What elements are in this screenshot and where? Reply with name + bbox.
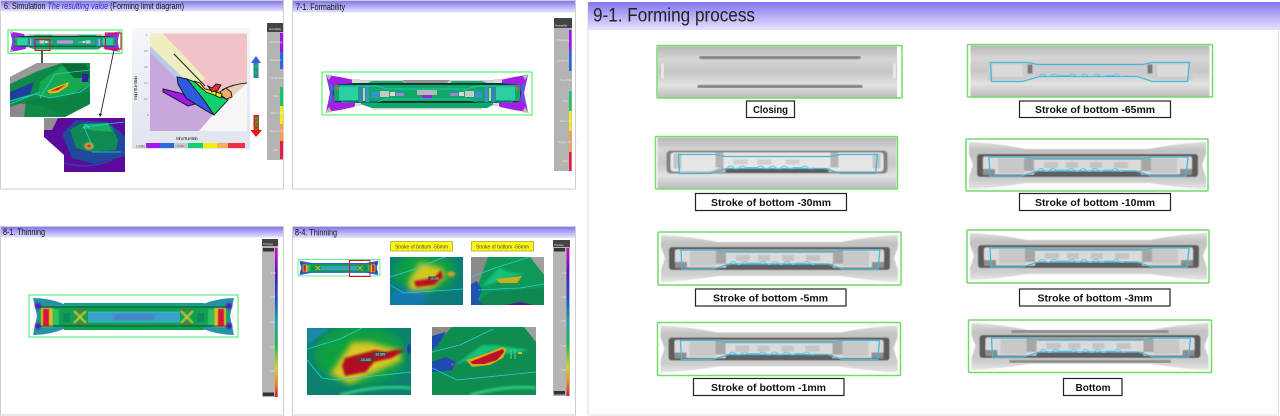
region: wrinkle (150, 52, 213, 131)
label: stroke right: Stroke of bottom -56mm (476, 244, 529, 250)
arrow: wrinkle direction: Wrinkle (254, 61, 260, 78)
color scale: thinning: 0.05 (270, 321, 275, 324)
region: safe lower (199, 83, 247, 131)
color scale: thinning: 0.10 (561, 345, 566, 348)
heading: formability: 7-1. Formability (296, 2, 345, 12)
stage: closing: Closing (753, 104, 788, 116)
legend sidebar: formability: Small Stretch (560, 79, 575, 82)
stage: stroke of bottom -65mm (968, 44, 1212, 118)
chart: forming limit diagram: 0.8 (144, 50, 148, 53)
chart: forming limit diagram: 0 (147, 114, 149, 117)
color scale: thinning: -0.05 (561, 272, 567, 275)
thumbnail: full part with zoom markers (8, 30, 122, 53)
legend (136, 143, 245, 148)
color scale: thinning: 0.00 (270, 296, 275, 299)
stage: stroke of bottom -5mm (658, 232, 901, 306)
color scale: thinning (553, 240, 570, 396)
red marker: center region (35, 40, 50, 50)
legend sidebar: formability: Safe (273, 95, 279, 98)
part: thinning contour (29, 295, 238, 337)
legend sidebar: formability: Excess Thinning (270, 130, 289, 133)
chart: forming limit diagram (132, 28, 250, 149)
color scale: thinning: Thinning (263, 243, 273, 246)
chart: forming limit diagram: 0.6 (144, 66, 148, 69)
region: compress (150, 46, 213, 115)
stage: stroke of bottom -3mm: Stroke of bottom -3mm (1038, 292, 1152, 304)
color scale: thinning: Thinning (554, 244, 564, 247)
legend sidebar: formability: Compress (270, 59, 282, 62)
panel: thinning overview (0, 226, 284, 415)
color scale: thinning: 0.15 (561, 369, 566, 372)
legend sidebar: formability: Formability (269, 28, 282, 31)
detail view: center region (10, 63, 90, 117)
region: thickening (150, 34, 206, 86)
detail: thinning contour large (307, 325, 411, 395)
chart: forming limit diagram: 1 (146, 34, 148, 37)
legend sidebar: formability: Compress (557, 60, 569, 62)
legend sidebar: formability (267, 23, 289, 160)
detail: formability contour small (471, 257, 544, 305)
detail: thinning contour small: -16.283 (430, 276, 439, 280)
part: formability contour (322, 72, 532, 115)
legend sidebar: formability: Thickening (557, 39, 570, 42)
thumbnail: thinning part with marker (298, 260, 380, 276)
region: small stretch (213, 83, 247, 115)
forming limit curve (174, 54, 247, 90)
legend: Limits (136, 144, 145, 148)
detail view: corner region (44, 118, 125, 172)
legend sidebar: formability: Risk of Split (560, 120, 574, 123)
label: stroke left: Stroke of bottom -56mm (395, 244, 448, 250)
heading: thinning detail: 8-4. Thinning (295, 228, 337, 238)
legend sidebar: formability: Formability (555, 24, 568, 28)
axis labels: Minor True Strain (176, 136, 198, 141)
panel: formability (292, 0, 578, 189)
red marker (350, 260, 370, 276)
stage: stroke of bottom -30mm: Stroke of bottom -30mm (711, 197, 831, 209)
red marker: corner region (106, 33, 121, 49)
legend sidebar: formability: Small Stretch (271, 77, 286, 80)
arrow: crack direction: Crack (254, 115, 260, 130)
arrow: corner marker to detail (99, 50, 114, 117)
legend sidebar: formability: Split (273, 149, 278, 152)
stage: stroke of bottom -1mm (658, 322, 900, 396)
panel: forming process (588, 2, 1280, 415)
legend sidebar: formability: Excess Thinning (559, 141, 578, 144)
heading: forming process: 9-1. Forming process (593, 6, 755, 26)
stage: stroke of bottom -1mm: Stroke of bottom -1mm (711, 382, 826, 394)
arrow: center marker to detail (41, 51, 43, 63)
legend sidebar: formability: Thickening (270, 41, 283, 44)
stage: stroke of bottom -5mm: Stroke of bottom -5mm (713, 292, 828, 304)
arrow: crack direction (250, 115, 262, 137)
legend sidebar: formability: Safe (563, 100, 569, 103)
color scale: thinning (262, 239, 278, 397)
panel: simulation forming limit diagram (0, 0, 289, 189)
chart: forming limit diagram: 0.2 (144, 98, 148, 101)
stage: stroke of bottom -65mm: Stroke of bottom -65mm (1035, 104, 1155, 116)
strain points (163, 77, 232, 115)
heading: simulation: 6. Simulation The resulting value (Forming limit diagram) (4, 1, 184, 11)
color scale: thinning: 0.05 (561, 320, 566, 323)
stage: bottom: Bottom (1076, 382, 1110, 394)
color scale: thinning: 0.10 (270, 346, 275, 349)
legend sidebar: formability (554, 18, 578, 171)
stage: stroke of bottom -3mm (967, 230, 1209, 306)
stage: closing (657, 46, 902, 118)
label: stroke left (390, 242, 452, 251)
detail: thinning contour small (390, 257, 463, 305)
stage: stroke of bottom -30mm (656, 136, 898, 210)
stage: stroke of bottom -10mm: Stroke of bottom -10mm (1035, 197, 1155, 209)
color scale: thinning: 0.15 (270, 370, 275, 373)
chart: forming limit diagram: 0.4 (144, 82, 148, 85)
detail: thinning contour large: -16.283 (360, 358, 371, 362)
panel: thinning detail (292, 226, 576, 415)
detail: formability contour large (432, 327, 536, 395)
heading: thinning: 8-1. Thinning (3, 227, 45, 237)
color scale: thinning: 0.00 (561, 296, 566, 299)
arrow: wrinkle direction (251, 56, 261, 78)
legend sidebar: formability: Risk of Split (271, 112, 285, 115)
chart: forming limit diagram: Major True Strain (133, 76, 138, 100)
color scale: thinning: -0.05 (270, 272, 276, 275)
legend sidebar: formability: Split (563, 160, 568, 163)
detail: thinning contour large: -16.525 (374, 352, 386, 356)
label: stroke right (472, 242, 534, 251)
legend: <0.00 (176, 144, 184, 148)
stage: stroke of bottom -10mm (966, 139, 1208, 210)
stage: bottom (968, 320, 1212, 396)
